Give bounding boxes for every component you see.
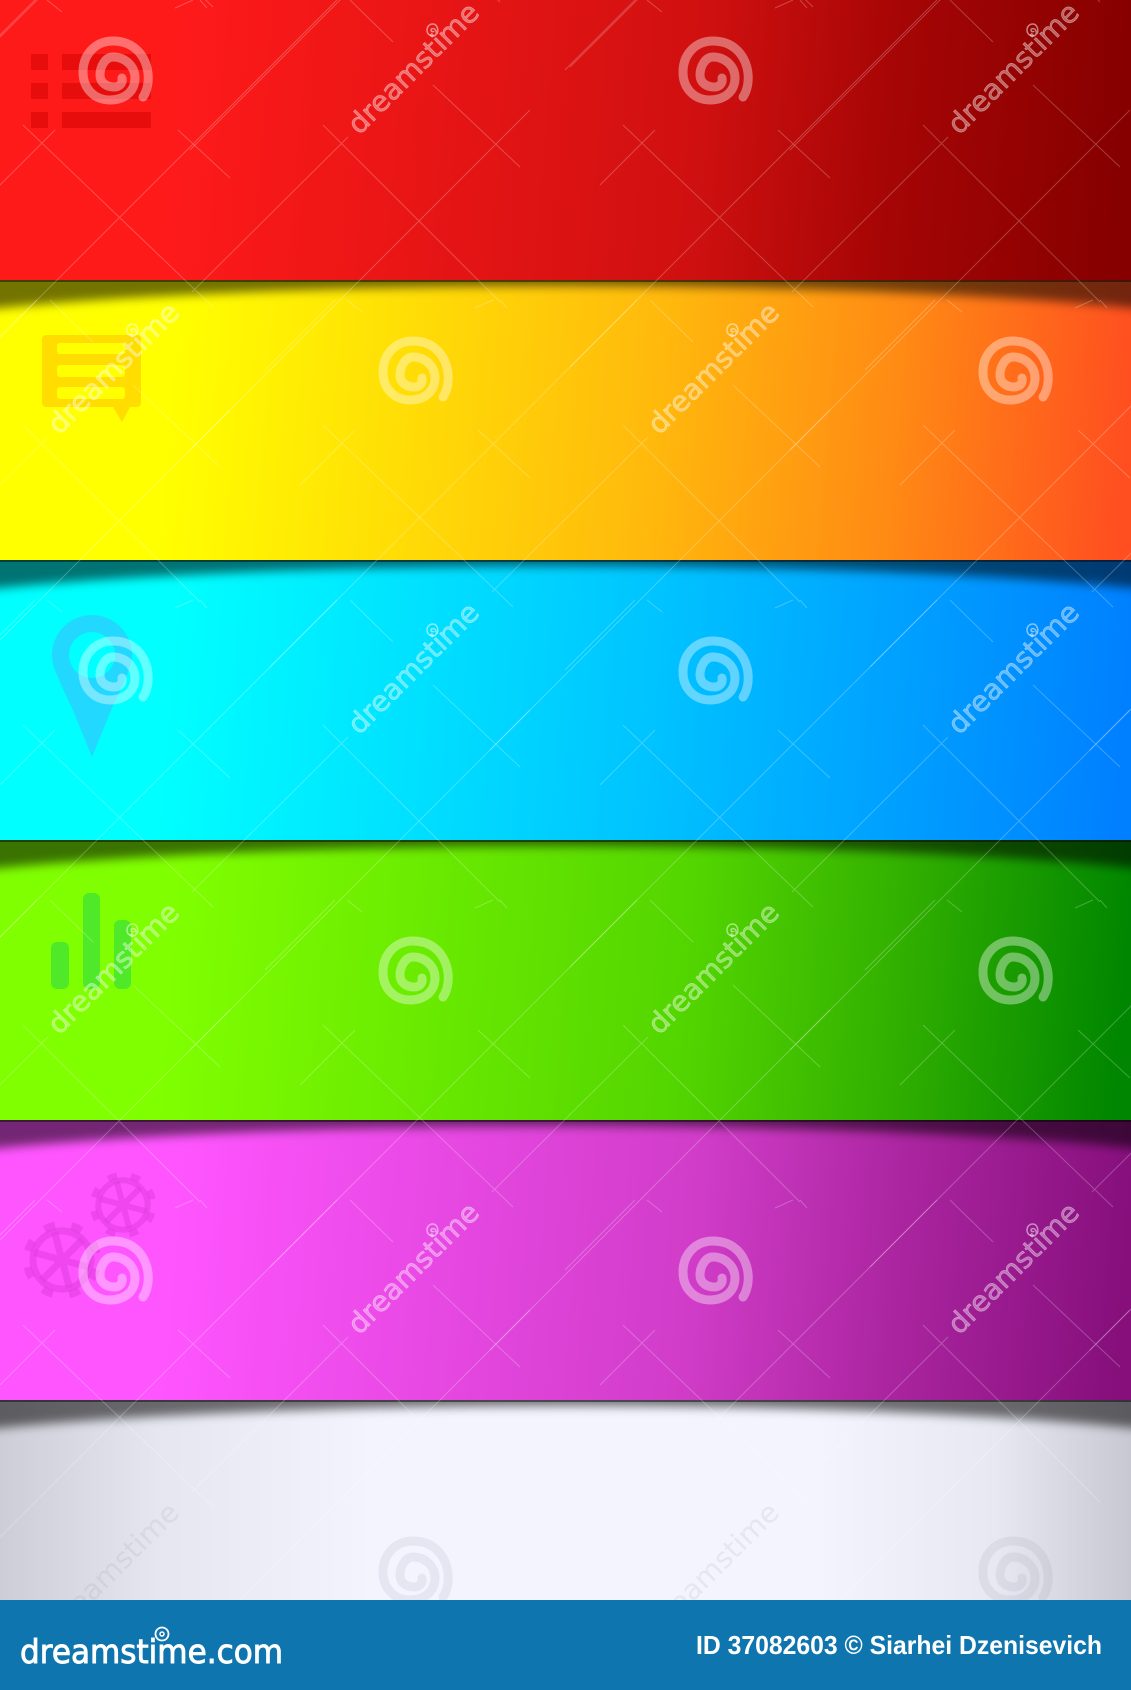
footer credit text: ID 37082603 © Siarhei Dzenisevich — [696, 1630, 1102, 1660]
watermark: dreamstime wordmarks: dreamstime — [941, 0, 1086, 141]
icon: speech bubble — [42, 335, 141, 422]
panel: purple band — [0, 1112, 1131, 1400]
panel: white bottom band — [0, 1392, 1131, 1600]
watermark: dreamstime wordmarks: dreamstime — [641, 296, 786, 441]
watermark: dreamstime wordmarks: dreamstime — [341, 1196, 486, 1341]
panel: red band — [0, 0, 1131, 280]
watermark: dreamstime wordmarks: dreamstime — [41, 296, 186, 441]
watermark: spirals — [83, 41, 1048, 1300]
watermark: dreamstime wordmarks — [41, 0, 1086, 1341]
watermark: dreamstime wordmarks: dreamstime — [641, 896, 786, 1041]
watermark: dreamstime wordmarks: dreamstime — [341, 596, 486, 741]
watermark: dreamstime wordmarks: dreamstime — [941, 1196, 1086, 1341]
panel: cyan band — [0, 552, 1131, 840]
footer bar — [0, 1600, 1131, 1690]
panel: yellow band — [0, 272, 1131, 560]
watermark: faint marks on white band: dreamstime — [641, 1496, 786, 1641]
icon: map pin — [52, 615, 132, 757]
watermark: faint marks on white band — [74, 1507, 1052, 1600]
watermark: dreamstime wordmarks: dreamstime — [941, 596, 1086, 741]
icon: gears — [19, 1169, 159, 1303]
panel: green band — [0, 832, 1131, 1120]
icon: list — [31, 54, 151, 128]
watermark: dreamstime wordmarks: dreamstime — [41, 896, 186, 1041]
watermark: faint marks on white band: dreamstime — [41, 1496, 186, 1641]
icon: bar chart — [51, 893, 131, 989]
footer logo: dreamstime.com: dreamstime.com — [20, 1632, 283, 1671]
watermark: dreamstime wordmarks: dreamstime — [341, 0, 486, 141]
